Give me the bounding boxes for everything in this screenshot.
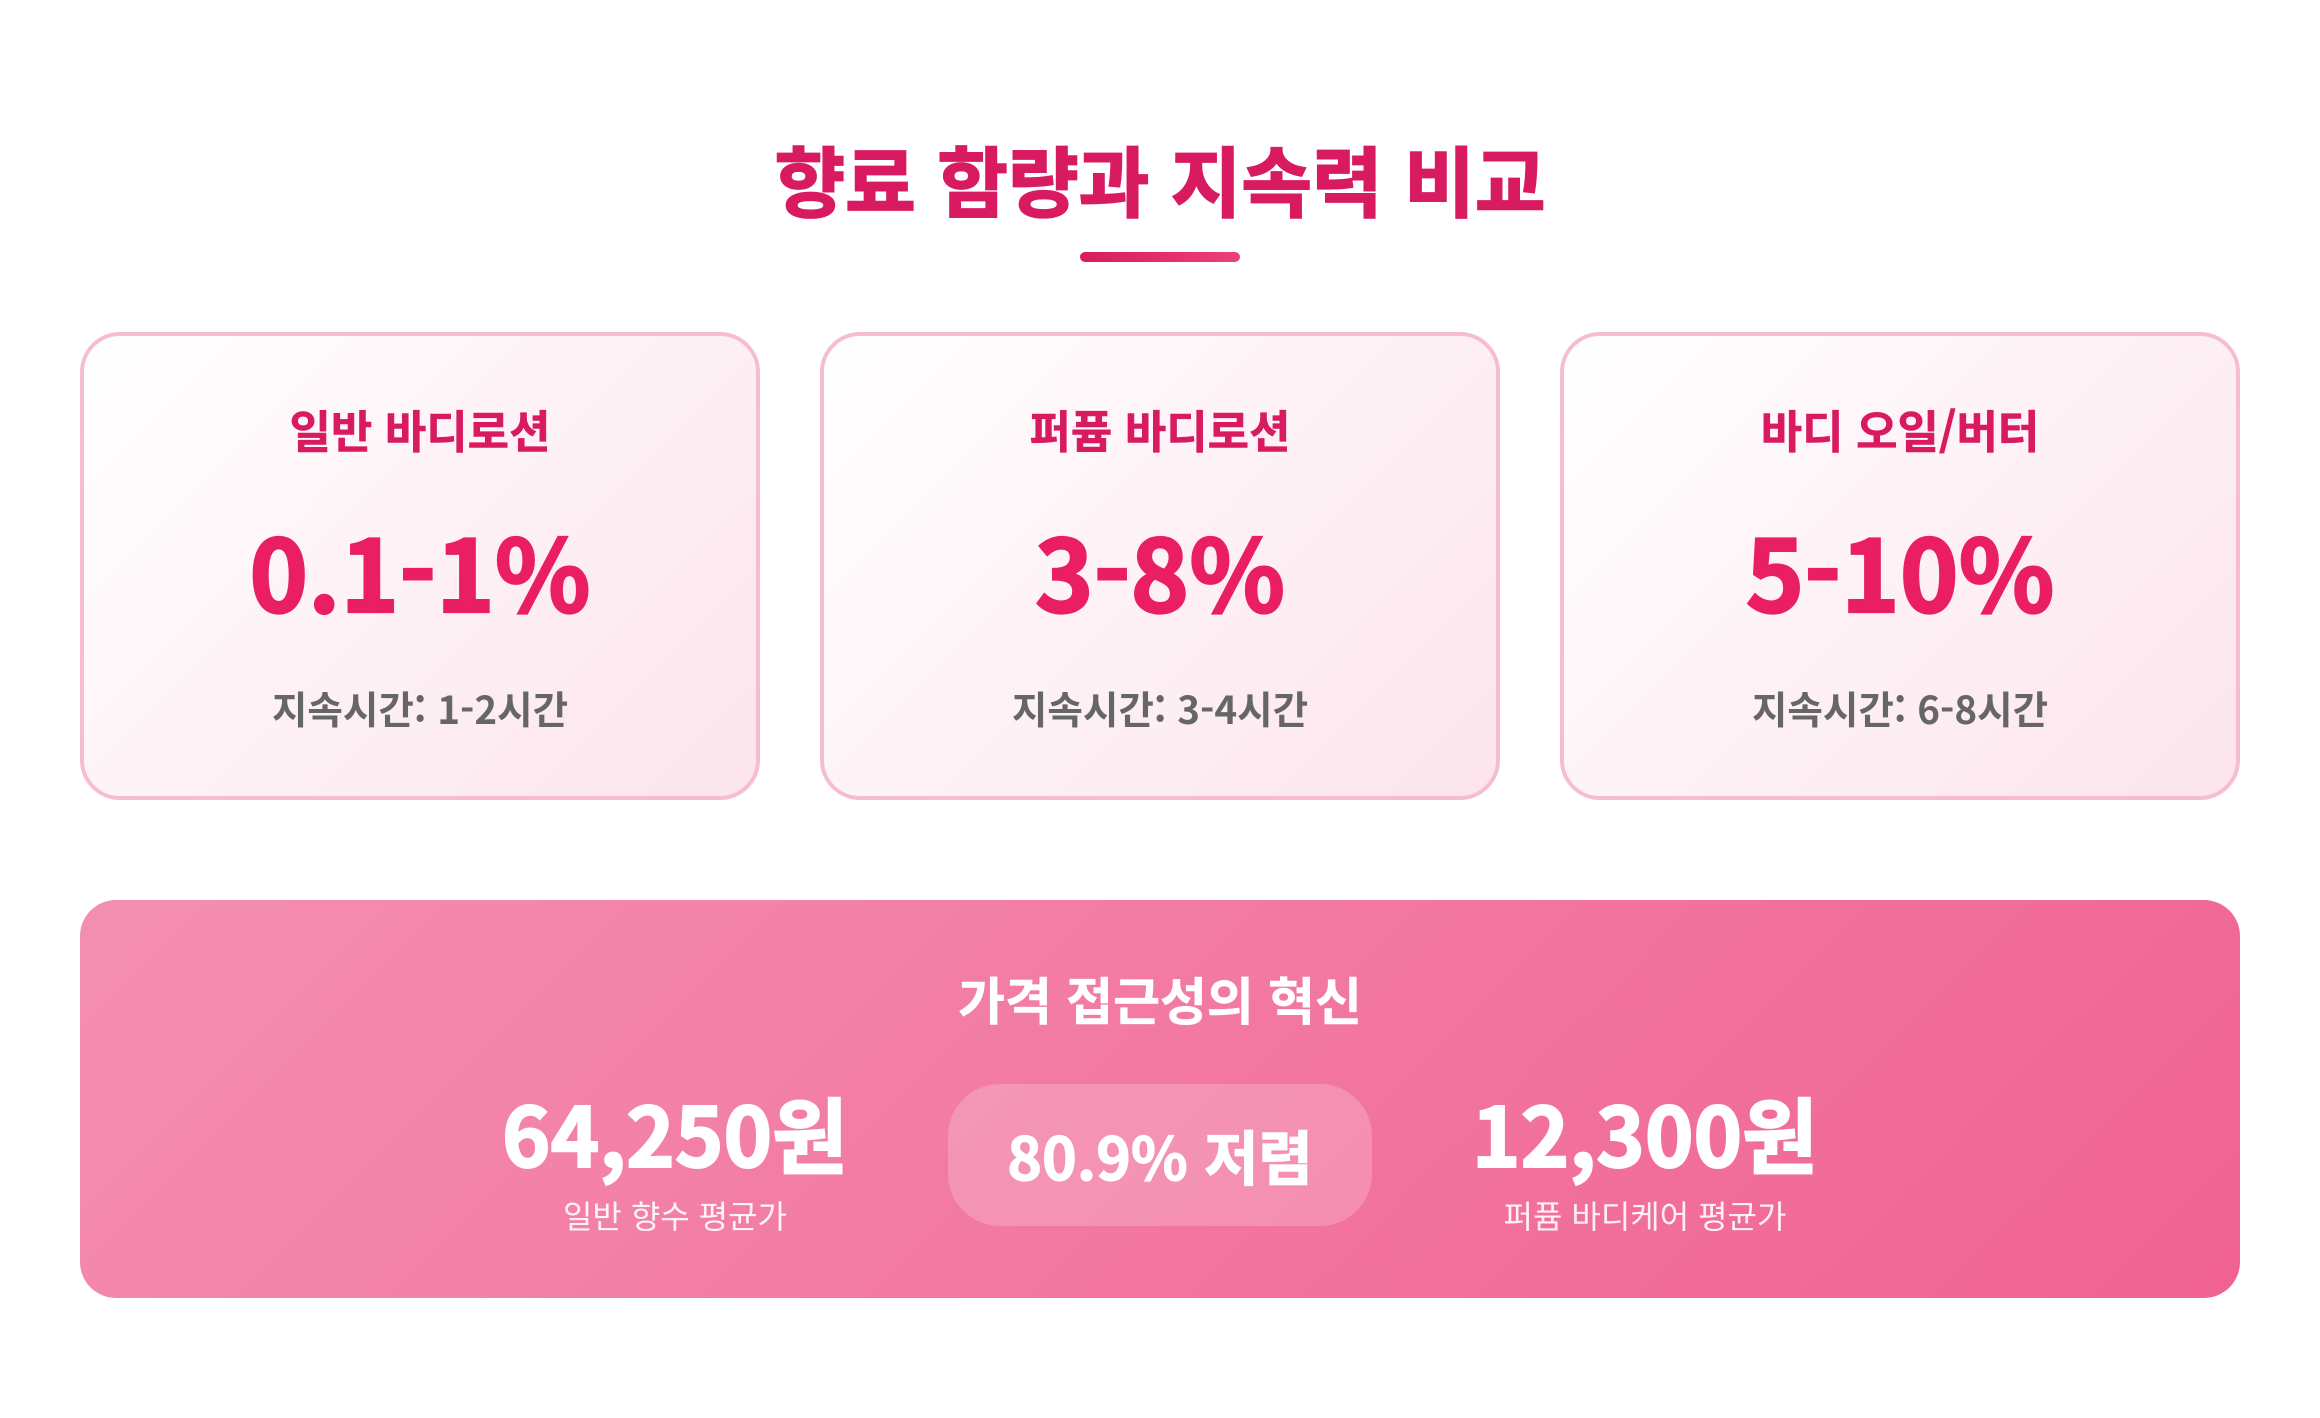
regular perfume label: 일반 향수 평균가 bbox=[563, 1192, 787, 1238]
panel: 일반 바디로션 bbox=[80, 332, 760, 800]
card heading: 바디 오일/버터 bbox=[1761, 396, 2039, 461]
panel: 바디 오일/버터 bbox=[1560, 332, 2240, 800]
discount text: 80.9% 저렴 bbox=[1007, 1112, 1313, 1197]
perfumed body care label: 퍼퓸 바디케어 평균가 bbox=[1504, 1192, 1786, 1238]
duration: 지속시간: 1-2시간 bbox=[272, 680, 568, 736]
card heading: 퍼퓸 바디로션 bbox=[1029, 396, 1290, 461]
fragrance percentage: 5-10% bbox=[1746, 497, 2054, 641]
duration: 지속시간: 6-8시간 bbox=[1752, 680, 2048, 736]
panel: 퍼퓸 바디로션 bbox=[820, 332, 1500, 800]
banner heading: 가격 접근성의 혁신 bbox=[958, 961, 1362, 1035]
fragrance percentage: 3-8% bbox=[1035, 497, 1285, 641]
panel: price banner bbox=[80, 900, 2240, 1298]
discount pill bbox=[948, 1084, 1372, 1226]
fragrance percentage: 0.1-1% bbox=[249, 497, 591, 641]
card heading: 일반 바디로션 bbox=[289, 396, 550, 461]
perfumed body care price: 12,300원 bbox=[1472, 1071, 1818, 1191]
duration: 지속시간: 3-4시간 bbox=[1012, 680, 1308, 736]
title: 향료 함량과 지속력 비교 bbox=[774, 123, 1546, 234]
regular perfume price: 64,250원 bbox=[502, 1071, 848, 1191]
title underline bbox=[1080, 252, 1240, 262]
